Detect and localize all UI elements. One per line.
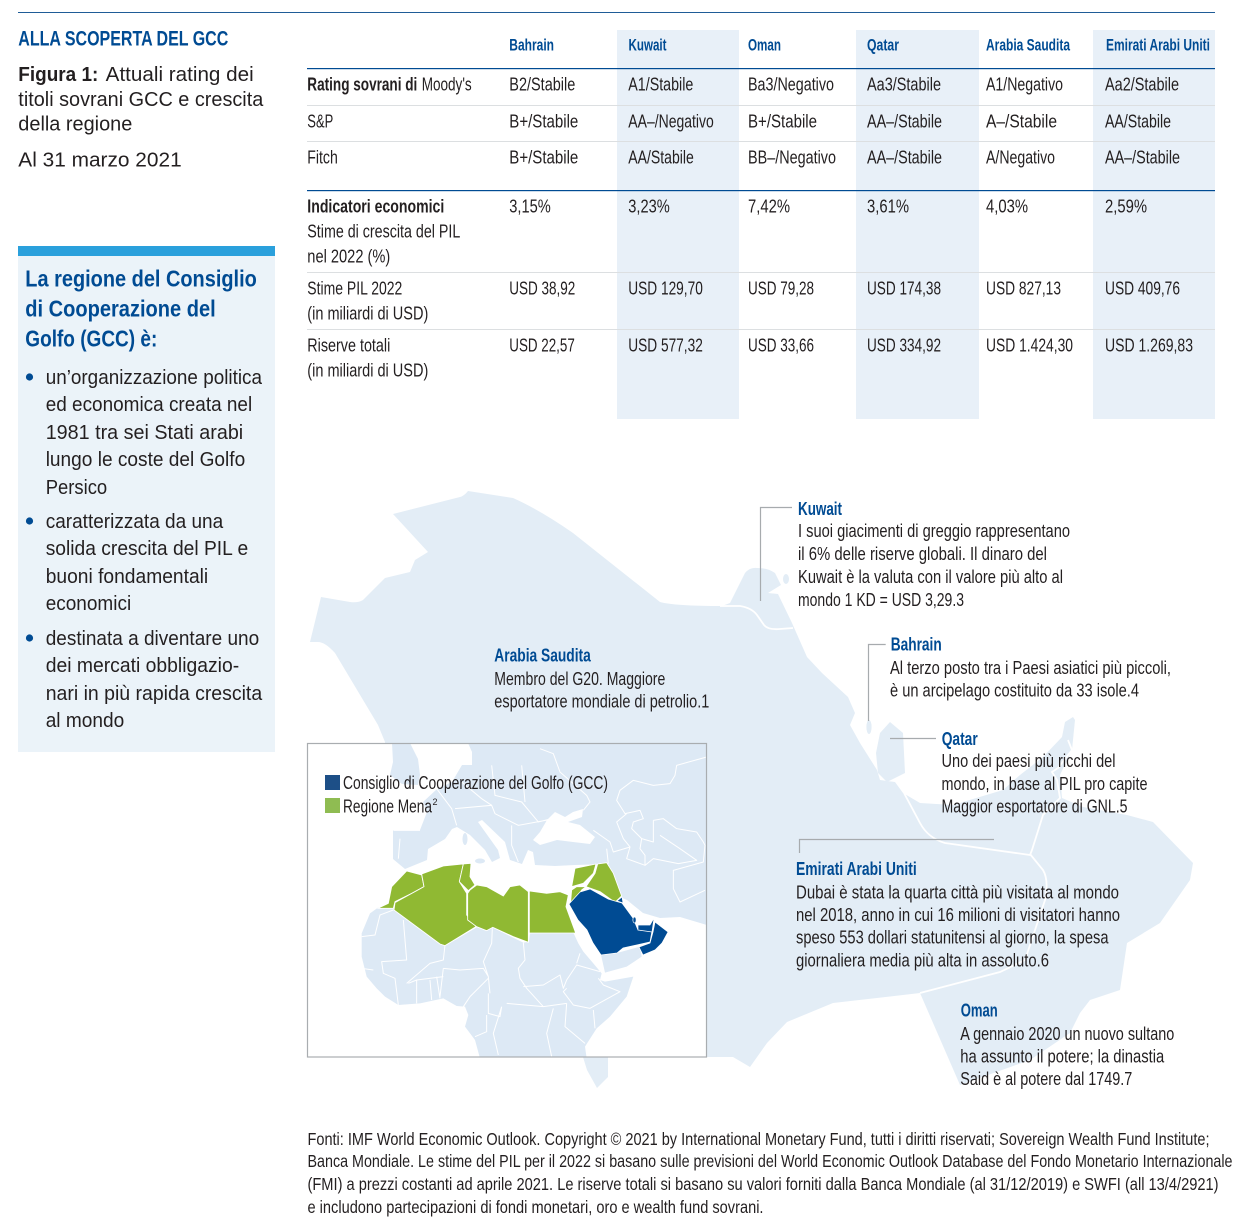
row: S&P: AA–/Stabile: [867, 112, 942, 132]
row: Fitch: B+/Stabile: [509, 147, 578, 167]
leader line: Kuwait: [760, 508, 792, 601]
source note: [308, 1129, 1232, 1217]
Bahrain land: [866, 720, 872, 734]
row: GDP 2022: (in miliardi di USD): [307, 303, 428, 323]
callout: Kuwait: Kuwait è la valuta con il valore più alto al: [798, 567, 1063, 587]
map: Arabian peninsula background: [310, 491, 1193, 1088]
Mediterranean islands: [462, 833, 468, 845]
leader line: Emirati: [800, 840, 994, 853]
callout: Oman: Said è al potere dal 1749.7: [960, 1069, 1132, 1089]
row: Fitch: AA/Stabile: [628, 147, 694, 167]
row: Fitch: A/Negativo: [986, 147, 1055, 167]
callout: Kuwait: [798, 498, 1070, 610]
figure caption: Figura 1:: [18, 63, 98, 86]
callout: Emirati Arabi Uniti: giornaliera media più alta in assoluto.6: [796, 951, 1049, 971]
legend item: MENA: [325, 797, 438, 817]
bullet 2: solida crescita del PIL e: [46, 537, 248, 560]
row: total reserves: (in miliardi di USD): [307, 361, 428, 381]
leader line: Bahrain: [868, 644, 886, 721]
row: GDP growth: 3,61%: [867, 197, 909, 217]
row: Fitch: BB–/Negativo: [748, 147, 836, 167]
row: S&P: AA–/Negativo: [628, 112, 714, 132]
top rule: [18, 12, 1215, 13]
callout: Arabia Saudita: [494, 645, 709, 712]
row: Moody's: Rating sovrani di: [307, 75, 417, 95]
callout: Kuwait: Kuwait: [798, 498, 842, 519]
Britain and Ireland: [390, 743, 420, 785]
callout: Qatar: mondo, in base al PIL pro capite: [942, 774, 1148, 794]
row: GDP 2022: USD 79,28: [748, 278, 814, 298]
bullet 1: lungo le coste del Golfo: [46, 448, 245, 471]
Africa land: [362, 907, 642, 1058]
row: total reserves: USD 1.424,30: [986, 336, 1073, 356]
row: GDP 2022: USD 409,76: [1105, 278, 1180, 298]
row: total reserves: Riserve totali: [307, 336, 390, 356]
figure caption: della regione: [18, 113, 132, 136]
callout: Arabia Saudita: esportatore mondiale di petrolio.1: [494, 692, 709, 712]
row: GDP 2022: USD 129,70: [628, 278, 703, 298]
table header: Oman: [748, 36, 781, 55]
row: total reserves: USD 33,66: [748, 336, 814, 356]
callout: Kuwait: I suoi giacimenti di greggio rappresentano: [798, 521, 1070, 541]
legend item: GCC: Consiglio di Cooperazione del Golfo (GCC): [343, 773, 608, 793]
row: S&P: A–/Stabile: [986, 112, 1057, 132]
legend item: MENA: Regione Mena: [343, 797, 433, 817]
bullet 2: caratterizzata da una: [46, 510, 224, 533]
row: GDP 2022: USD 174,38: [867, 278, 941, 298]
legend item: MENA: 2: [432, 797, 438, 807]
source note: e includono partecipazioni di fondi monetari, oro e wealth fund sovrani.: [308, 1197, 764, 1217]
row: Fitch: AA–/Stabile: [867, 147, 942, 167]
row: S&P: B+/Stabile: [509, 112, 578, 132]
row: total reserves: [307, 336, 1193, 381]
row: Moody's: [307, 75, 1179, 95]
row: total reserves: USD 22,57: [509, 336, 575, 356]
callout: Qatar: [942, 728, 1148, 816]
row: GDP growth: 3,15%: [509, 197, 551, 217]
row: S&P: [307, 112, 1171, 132]
row: Moody's: A1/Negativo: [986, 75, 1063, 95]
row: GDP growth: 4,03%: [986, 197, 1028, 217]
callout: Emirati Arabi Uniti: nel 2018, anno in cui 16 milioni di visitatori hanno: [796, 905, 1120, 925]
row: GDP 2022: USD 827,13: [986, 278, 1061, 298]
date: Al 31 marzo 2021: [18, 149, 182, 172]
inset map: MENA region: [308, 743, 707, 1058]
callout: Oman: Oman: [961, 1000, 998, 1021]
callout: Qatar: Maggior esportatore di GNL.5: [942, 796, 1128, 816]
Europe and Asia land: [393, 743, 707, 925]
row: GDP growth: 7,42%: [748, 197, 790, 217]
row: Moody's: Aa3/Stabile: [867, 75, 941, 95]
Yemen land: [601, 947, 642, 973]
table header: Bahrain: [509, 36, 554, 55]
panel heading: La regione del Consiglio: [25, 266, 257, 292]
row: total reserves: USD 334,92: [867, 336, 941, 356]
bullet 3: destinata a diventare uno: [46, 627, 259, 650]
callout: Emirati Arabi Uniti: [796, 858, 1120, 971]
national borders: [720, 606, 1072, 993]
callout: Emirati Arabi Uniti: Emirati Arabi Uniti: [796, 858, 917, 879]
row: total reserves: USD 1.269,83: [1105, 336, 1193, 356]
bullet 1: 1981 tra sei Stati arabi: [46, 421, 243, 444]
bullet 1: ed economica creata nel: [46, 393, 252, 416]
row: GDP growth: [307, 197, 1147, 267]
GCC countries: [569, 889, 668, 955]
row: Moody's: A1/Stabile: [628, 75, 693, 95]
row: GDP growth: Stime di crescita del PIL: [307, 222, 460, 242]
row: S&P: AA/Stabile: [1105, 112, 1171, 132]
callout: Oman: A gennaio 2020 un nuovo sultano: [960, 1024, 1174, 1044]
row: Moody's: Moody's: [422, 75, 472, 95]
row: GDP 2022: [307, 278, 1180, 323]
callout: Bahrain: Bahrain: [891, 634, 942, 655]
callout: Oman: ha assunto il potere; la dinastia: [960, 1047, 1165, 1067]
bullet 2: economici: [46, 592, 131, 615]
callout: Qatar: Uno dei paesi più ricchi del: [942, 751, 1116, 771]
bullet 3: [26, 627, 263, 732]
bullet 2: [26, 510, 248, 615]
row: Fitch: Fitch: [307, 147, 338, 167]
row: GDP growth: nel 2022 (%): [307, 247, 390, 267]
Qatar land: [876, 722, 905, 782]
callout: Qatar: Qatar: [942, 728, 978, 749]
panel: GCC description: [18, 246, 275, 752]
figure caption: [18, 63, 264, 136]
row: S&P: B+/Stabile: [748, 112, 817, 132]
callout: Arabia Saudita: Membro del G20. Maggiore: [494, 669, 665, 689]
row: S&P: S&P: [307, 112, 333, 132]
row: GDP growth: Indicatori economici: [307, 197, 444, 217]
row: GDP 2022: Stime PIL 2022: [307, 278, 402, 298]
bullet 3: nari in più rapida crescita: [46, 682, 263, 705]
figure caption: Attuali rating dei: [106, 63, 254, 86]
table header: Arabia Saudita: [986, 36, 1070, 55]
row: Moody's: Ba3/Negativo: [748, 75, 834, 95]
column bands: [617, 30, 1215, 419]
panel heading: Golfo (GCC) è:: [25, 326, 157, 352]
table header: Kuwait: [628, 36, 667, 55]
bullet 1: Persico: [46, 476, 107, 499]
row: GDP growth: 3,23%: [628, 197, 670, 217]
callout: Kuwait: mondo 1 KD = USD 3,29.3: [798, 590, 964, 610]
row: Fitch: [307, 147, 1180, 167]
MENA countries: [378, 863, 622, 946]
Europe and Asia borders: [393, 765, 555, 862]
bullet 3: al mondo: [46, 709, 124, 732]
legend: [325, 773, 608, 817]
row: Fitch: AA–/Stabile: [1105, 147, 1180, 167]
heading block: [18, 28, 264, 172]
ratings table: [307, 30, 1215, 419]
callout: Arabia Saudita: Arabia Saudita: [494, 645, 591, 666]
callout: Bahrain: [890, 634, 1171, 701]
bullet 1: [26, 366, 263, 499]
row: GDP growth: 2,59%: [1105, 197, 1147, 217]
section title: ALLA SCOPERTA DEL GCC: [18, 28, 228, 51]
bullet 3: dei mercati obbligazio-: [46, 654, 239, 677]
callout: Bahrain: Al terzo posto tra i Paesi asiatici più piccoli,: [890, 658, 1171, 678]
callout: Emirati Arabi Uniti: speso 553 dollari statunitensi al giorno, la spesa: [796, 928, 1109, 948]
row: Moody's: B2/Stabile: [509, 75, 575, 95]
figure caption: titoli sovrani GCC e crescita: [18, 88, 264, 111]
table header: Qatar: [867, 36, 899, 55]
bullet 2: buoni fondamentali: [46, 565, 208, 588]
Black Sea: [533, 809, 595, 845]
row: Moody's: Aa2/Stabile: [1105, 75, 1179, 95]
leader line: Qatar: [890, 738, 936, 740]
Africa borders: [362, 910, 620, 1057]
callout: Emirati Arabi Uniti: Dubai è stata la quarta città più visitata al mondo: [796, 882, 1119, 902]
table header: [509, 36, 1210, 55]
row: total reserves: USD 577,32: [628, 336, 703, 356]
bullet 1: un’organizzazione politica: [46, 366, 263, 389]
row: GDP 2022: USD 38,92: [509, 278, 575, 298]
callout: Kuwait: il 6% delle riserve globali. Il dinaro del: [798, 544, 1047, 564]
panel heading: [25, 266, 257, 352]
Bubiyan island: [783, 574, 789, 584]
callout: Oman: [960, 1000, 1174, 1089]
panel heading: di Cooperazione del: [25, 296, 216, 322]
callout: Bahrain: è un arcipelago costituito da 33 isole.4: [890, 681, 1139, 701]
